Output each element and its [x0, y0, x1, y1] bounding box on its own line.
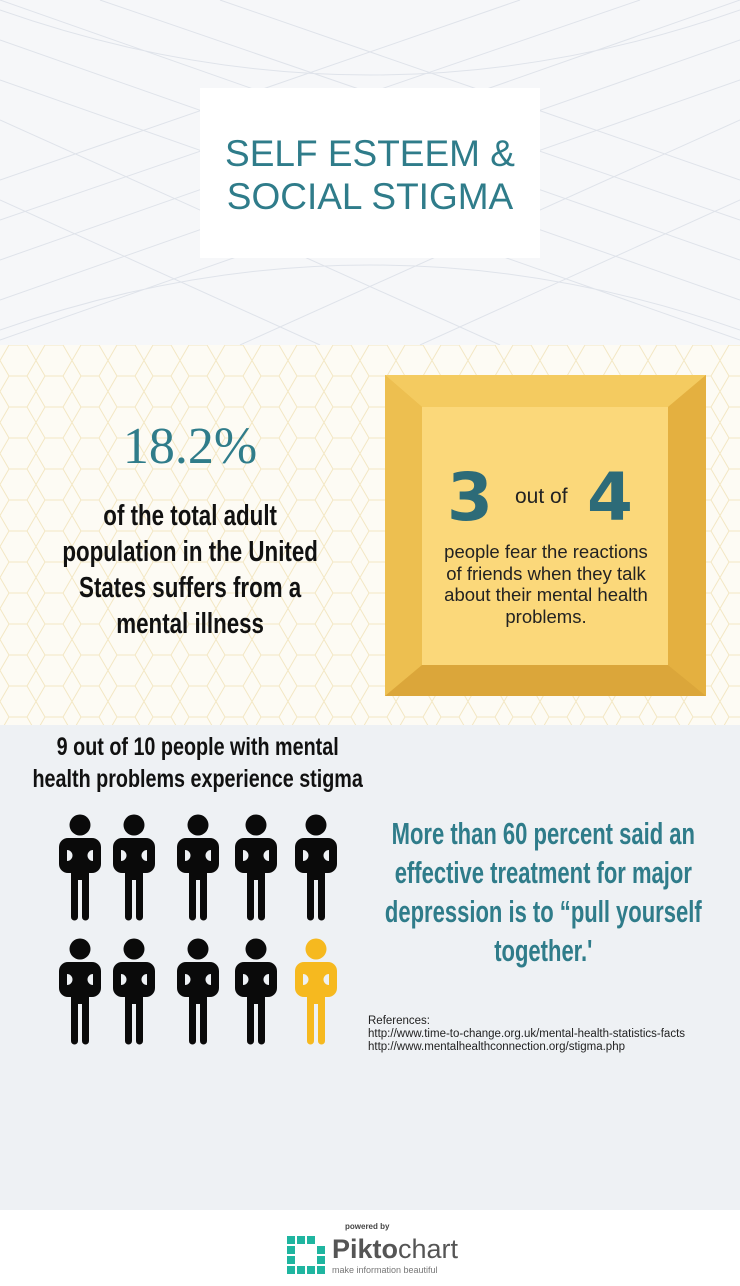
footer: piktochart: make information beautiful: [332, 1265, 438, 1275]
big numbers: 3: [447, 459, 493, 536]
heading: 9 out of 10: [32, 733, 363, 793]
title: SOCIAL STIGMA: [227, 176, 513, 217]
quote: 60 percent: effective treatment for major: [395, 855, 692, 890]
description: problems.: [505, 606, 587, 626]
references: http://www.time-to-change.org.uk/mental-health-statistics-facts: [368, 1028, 685, 1040]
stat: 18.2%: [62, 418, 318, 640]
description: [444, 541, 648, 627]
quote: 60 percent: More than 60 percent said an: [392, 816, 695, 851]
big numbers: 4: [587, 459, 633, 536]
big numbers: [447, 459, 633, 536]
honeycomb section: [0, 345, 740, 725]
title: [225, 133, 515, 217]
references: References:: [368, 1015, 430, 1027]
stat: 18.2%: of the total adult population in the United States suffers from a mental illness: [62, 500, 318, 640]
quote: 60 percent: [385, 816, 702, 968]
stat: 18.2%: 18.2%: [123, 418, 257, 475]
title: SELF ESTEEM &: [225, 133, 515, 174]
gold box: 3 out of 4: [385, 375, 706, 696]
quote: 60 percent: depression is to “pull yourself: [385, 894, 702, 929]
footer: piktochart: [0, 1210, 740, 1286]
title box: [200, 88, 540, 258]
pictogram: people: [59, 814, 337, 1044]
description: about their mental health: [444, 584, 648, 605]
footer: piktochart: powered by: [345, 1222, 389, 1231]
heading: 9 out of 10: health problems experience stigma: [32, 765, 363, 793]
header section background: [0, 0, 740, 345]
piktochart logo: [287, 1236, 325, 1274]
description: people fear the reactions: [444, 541, 648, 562]
footer: piktochart: Piktochart: [332, 1234, 458, 1264]
heading: 9 out of 10: 9 out of 10 people with mental: [57, 733, 339, 761]
quote: 60 percent: together.': [494, 933, 592, 968]
description: of friends when they talk: [446, 562, 646, 584]
bottom section: [0, 725, 740, 1210]
references: http://www.mentalhealthconnection.org/stigma.php: [368, 1041, 625, 1053]
big numbers: out of: [515, 485, 568, 508]
references: [368, 1015, 685, 1053]
